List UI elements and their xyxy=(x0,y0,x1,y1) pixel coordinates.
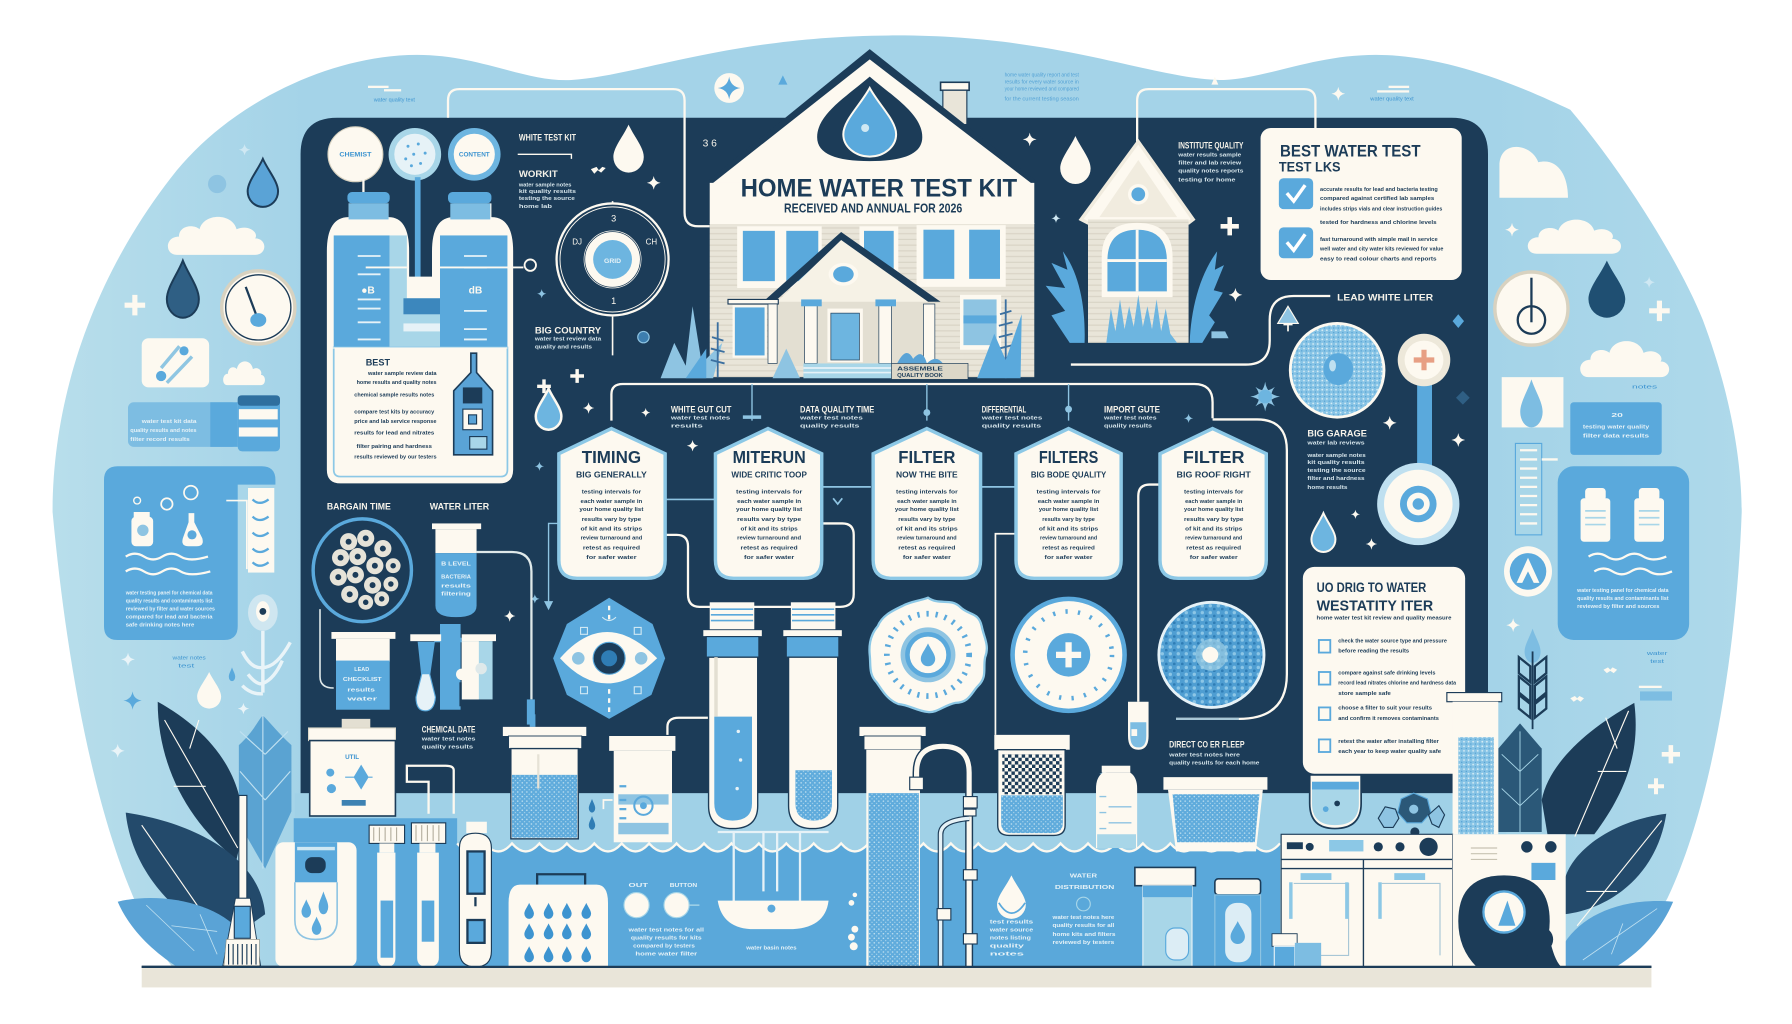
lead water filter label: LEAD WHITE LITER xyxy=(1337,293,1434,303)
bottom label text near vial: water test notes here xyxy=(1168,753,1240,759)
gauge right xyxy=(1495,272,1568,345)
filter card: filters: BIG BODE QUALITY xyxy=(1031,470,1107,480)
jar black pattern xyxy=(994,735,1070,835)
panel sparkles right xyxy=(1099,414,1465,778)
filter card: timing: each water sample in xyxy=(581,499,643,505)
chemical date text: water test notes xyxy=(420,737,475,743)
labels above filter cards: results xyxy=(671,423,703,429)
filter card: filter: retest as required xyxy=(898,546,956,552)
filter card: filter right: results vary by type xyxy=(1184,517,1243,523)
filter card: filters: results vary by type xyxy=(1042,517,1095,523)
twin bottle panel: home results and quality notes xyxy=(357,380,437,386)
filter card: miterun: review turnaround and xyxy=(737,535,802,541)
bottom drop and text: quality xyxy=(990,943,1026,949)
buttons with labels: compared by testers xyxy=(633,943,695,949)
filter card: filter right: each water sample in xyxy=(1185,499,1243,505)
filter card: filters: review turnaround and xyxy=(1040,535,1098,541)
bottom drop and text: WATER xyxy=(1070,874,1097,880)
filter card: timing: review turnaround and xyxy=(581,535,643,541)
top panel text: white test kit xyxy=(518,133,576,210)
labels above filter cards: water test notes xyxy=(980,415,1042,421)
top right text: testing for home xyxy=(1178,178,1235,184)
twin bottle panel: chemical sample results notes xyxy=(354,393,434,399)
bottom drop and text: home kits and filters xyxy=(1053,932,1115,938)
bottom label text near vial: quality results for each home xyxy=(1169,761,1259,767)
labels: bargain time, water liter: WATER LITER xyxy=(430,502,490,512)
right blue panel: quality results and contaminants list xyxy=(1577,596,1669,602)
top faint text block: results for every water source in xyxy=(1005,79,1079,85)
filter card: filter right: of kit and its strips xyxy=(1185,526,1242,532)
buttons with labels xyxy=(624,883,704,957)
big garage text xyxy=(1306,429,1367,491)
card: checklist: and confirm it removes contaminants xyxy=(1338,716,1439,722)
left blue panel: water testing panel for chemical data xyxy=(125,590,213,596)
top right text: filter and lab review xyxy=(1178,161,1242,167)
chemical date text: CHEMICAL DATE xyxy=(422,725,475,735)
filter card: filter: results vary by type xyxy=(898,517,955,523)
kit case xyxy=(509,874,608,967)
right small blue card: 20 xyxy=(1611,413,1623,419)
filter card: miterun: MITERUN xyxy=(733,447,806,467)
chemical date text: quality results xyxy=(422,745,473,751)
small stand jar: CHECKLIST xyxy=(343,677,382,683)
right sparkles: test xyxy=(1650,659,1665,665)
top decorations: water quality text xyxy=(373,98,415,104)
filter card: filter right: retest as required xyxy=(1186,546,1242,552)
card: best water test: includes strips vials and clear instruction guides xyxy=(1320,206,1442,212)
small house leaves xyxy=(1046,251,1229,343)
textured filter disc xyxy=(1290,323,1384,417)
cabinet xyxy=(1281,834,1453,967)
card: best water test: accurate results for lead and bacteria testing xyxy=(1320,187,1438,193)
card: checklist: each year to keep water quality safe xyxy=(1338,749,1441,755)
box: UTIL xyxy=(345,754,359,761)
bottom drop and text: quality results for all xyxy=(1053,923,1115,929)
plus circle with tube and lens xyxy=(1377,334,1459,545)
card: best water test: well water and city water kits reviewed for value xyxy=(1319,246,1443,252)
filter card: filters: retest as required xyxy=(1042,546,1095,552)
bottom label text near vial: DIRECT CO ER FLEEP xyxy=(1169,739,1245,749)
buttons with labels: home water filter xyxy=(635,951,698,957)
subtitle: RECEIVED AND ANNUAL FOR 2026 xyxy=(784,202,962,216)
top right text: quality notes reports xyxy=(1178,169,1243,175)
hourglass group xyxy=(410,624,496,711)
card: checklist: WESTATITY ITER xyxy=(1317,598,1433,614)
twin bottle panel: compare test kits by accuracy xyxy=(354,410,435,416)
tall tube right xyxy=(1447,693,1502,834)
bottom drop and text: notes listing xyxy=(990,935,1031,941)
filter card: filters: for safer water xyxy=(1045,555,1094,561)
pipe loop xyxy=(407,766,454,814)
big country label: water test review data xyxy=(534,337,602,343)
left blue band: quality results and notes xyxy=(130,428,197,434)
top faint text block: for the current testing season xyxy=(1005,97,1079,103)
buttons with labels: BUTTON xyxy=(670,883,697,889)
top faint text block: your home reviewed and compared xyxy=(1005,86,1079,92)
bubbles xyxy=(848,893,858,950)
number label: 3 6 xyxy=(703,138,717,149)
right small drop card xyxy=(1502,377,1563,427)
top decorations xyxy=(368,73,1414,104)
left blue panel: quality results and contaminants list xyxy=(126,598,213,604)
card: checklist: check the water source type and pressure xyxy=(1338,638,1447,644)
labels above filter cards: WHITE GUT CUT xyxy=(671,405,732,415)
card: checklist xyxy=(1303,567,1465,774)
floor line top xyxy=(142,966,1651,968)
filter card: miterun: WIDE CRITIC TOOP xyxy=(731,470,807,480)
badge: wavy seal xyxy=(869,598,987,712)
basin on stem: water basin notes xyxy=(745,946,797,952)
twin bottle panel: water sample review data xyxy=(367,371,437,377)
floor xyxy=(142,966,1651,987)
ladder strip xyxy=(1515,443,1558,535)
top panel text: white test kit: home lab xyxy=(519,204,553,210)
card: best water test: easy to read colour charts and reports xyxy=(1320,257,1437,263)
filter card: filter: review turnaround and xyxy=(897,535,957,541)
connector plug xyxy=(1176,718,1239,720)
filter card: miterun xyxy=(715,429,822,578)
labels above filter cards: water test notes xyxy=(799,415,863,421)
buttons with labels: water test notes for all xyxy=(627,927,704,933)
bottom drop and text: DISTRIBUTION xyxy=(1055,885,1114,891)
bottom cups xyxy=(1272,934,1321,967)
left small card with tools xyxy=(142,338,209,387)
filter card: filters: your home quality list xyxy=(1039,507,1098,513)
small stand jar: water xyxy=(345,697,379,703)
filter card: miterun: for safer water xyxy=(744,555,795,561)
tall cylinder xyxy=(859,727,926,967)
right sparkles xyxy=(1506,618,1680,794)
three label circles: CONTENT xyxy=(459,152,490,159)
lower tubes xyxy=(369,823,446,967)
card: checklist: before reading the results xyxy=(1338,649,1409,655)
bottom drop and text: water source xyxy=(988,927,1033,933)
big garage text: water lab reviews xyxy=(1306,441,1365,447)
box xyxy=(309,719,395,816)
house plants xyxy=(661,299,1022,378)
bin xyxy=(1163,777,1267,851)
cream drop and sparkles xyxy=(537,125,661,298)
filter card: timing: of kit and its strips xyxy=(581,526,642,532)
porch xyxy=(728,232,968,379)
cup xyxy=(1310,775,1361,829)
filter card: filter: for safer water xyxy=(903,555,952,561)
labels above filter cards: quality results xyxy=(800,423,859,429)
washer xyxy=(1453,834,1566,967)
big garage text: filter and hardness xyxy=(1307,476,1365,482)
card: best water test: compared against certified lab samples xyxy=(1320,196,1434,202)
dial: 3 xyxy=(611,214,616,224)
spiky star xyxy=(1246,377,1285,416)
twin bottle panel: results for lead and nitrates xyxy=(354,430,434,436)
top decorations: water quality text xyxy=(1369,97,1414,103)
big country label: BIG COUNTRY xyxy=(535,326,601,336)
top faint text block: home water quality report and test xyxy=(1005,73,1079,79)
card: best water test: TEST LKS xyxy=(1279,159,1341,174)
filter card: timing: BIG GENERALLY xyxy=(576,470,647,480)
right sparkles: water xyxy=(1645,651,1668,657)
three label circles: CHEMIST xyxy=(339,152,372,159)
connector: lead water liter xyxy=(1071,296,1330,365)
test tube two xyxy=(783,602,842,829)
dial: 1 xyxy=(611,296,616,306)
big garage text: testing the source xyxy=(1307,468,1366,474)
card: checklist: store sample safe xyxy=(1338,691,1391,697)
left blue band: water test kit data xyxy=(141,419,198,425)
top right connector xyxy=(1137,89,1315,142)
top panel text: white test kit: testing the source xyxy=(519,196,575,202)
bottom drop and text xyxy=(988,874,1115,957)
jar two xyxy=(589,718,709,842)
card: checklist: UO DRIG TO WATER xyxy=(1317,580,1426,595)
dark central panel xyxy=(301,118,1488,795)
filter card: timing: results vary by type xyxy=(582,517,641,523)
big garage text: home results xyxy=(1307,485,1347,491)
filter card: filter right: FILTER xyxy=(1183,447,1245,467)
card: best water test: BEST WATER TEST xyxy=(1280,142,1421,161)
bottom drop and text: reviewed by testers xyxy=(1053,940,1114,946)
filter card: miterun: of kit and its strips xyxy=(741,526,798,532)
jar one xyxy=(503,727,586,839)
top tube column: B LEVEL xyxy=(441,562,471,568)
main house xyxy=(705,49,1039,379)
filter card: filter: of kit and its strips xyxy=(896,526,958,532)
filter card: timing: testing intervals for xyxy=(582,490,642,496)
right blue panel xyxy=(1558,466,1689,640)
badge: textured disc xyxy=(1159,602,1264,707)
left outer column: drops, cloud, gauge xyxy=(125,144,278,318)
buttons with labels: quality results for kits xyxy=(631,935,702,941)
top tube column: BACTERIA xyxy=(441,574,471,580)
card: checklist: record lead nitrates chlorine and hardness data xyxy=(1338,681,1457,687)
bowl of filter media xyxy=(313,519,411,622)
small stand jar xyxy=(320,609,395,710)
labels above filter cards: quality results xyxy=(1104,423,1152,429)
card: best water test xyxy=(1261,128,1462,280)
brush device xyxy=(223,795,261,966)
right small blue card xyxy=(1570,385,1662,455)
left blue band: filter record results xyxy=(130,437,190,443)
left leaves xyxy=(118,702,291,967)
title: HOME WATER TEST KIT xyxy=(741,175,1018,203)
filter card: filter: FILTER xyxy=(898,447,956,467)
top faint text block xyxy=(1005,73,1079,103)
filter card: timing: your home quality list xyxy=(579,507,644,513)
gears xyxy=(1378,793,1445,837)
filter card: miterun: retest as required xyxy=(741,546,798,552)
filter card: filter right: BIG ROOF RIGHT xyxy=(1177,470,1252,480)
right leaves xyxy=(1498,703,1673,967)
right small blue card: notes xyxy=(1632,385,1657,391)
eye ornament xyxy=(242,594,290,694)
top panel text: white test kit: kit quality results xyxy=(519,189,576,195)
small triangle marker xyxy=(1278,306,1470,405)
filter card: timing xyxy=(559,429,665,578)
card: best water test: fast turnaround with simple mail in service xyxy=(1320,237,1438,243)
faucet xyxy=(910,746,977,967)
dial: CH xyxy=(646,238,657,247)
windows xyxy=(737,225,1006,350)
labels: bargain time, water liter: BARGAIN TIME xyxy=(327,502,391,512)
filter card: filter: each water sample in xyxy=(897,499,957,505)
filter card: filter: NOW THE BITE xyxy=(896,470,958,480)
card: checklist: choose a filter to suit your results xyxy=(1338,706,1432,712)
graduated bottle xyxy=(1096,766,1137,848)
filter card: filter right: testing intervals for xyxy=(1184,490,1244,496)
filter card: filters: FILTERS xyxy=(1039,447,1098,467)
top tube column: results xyxy=(441,583,471,589)
bottom drop and text: water test notes here xyxy=(1051,915,1114,921)
wheat xyxy=(1519,629,1546,729)
right blue panel: reviewed by filter and sources xyxy=(1577,604,1659,610)
top panel text: white test kit: WHITE TEST KIT xyxy=(519,133,576,143)
filter card: timing: for safer water xyxy=(586,555,638,561)
left blue panel: safe drinking notes here xyxy=(126,622,194,628)
filter card: timing: retest as required xyxy=(583,546,641,552)
dial: DJ xyxy=(572,238,582,247)
left lower sparkles and drop: test xyxy=(178,663,195,669)
card: checklist: retest the water after installing filter xyxy=(1338,739,1440,745)
basin on stem xyxy=(718,832,829,952)
labels above filter cards: water test notes xyxy=(1103,415,1157,421)
filter card: filters: of kit and its strips xyxy=(1039,526,1098,532)
labels: bargain time, water liter xyxy=(327,502,490,512)
filter card: timing: TIMING xyxy=(582,447,641,467)
small ring xyxy=(638,331,649,343)
right circle icon xyxy=(1504,546,1552,597)
filter card: filter: your home quality list xyxy=(895,507,959,513)
labels above filter cards: quality results xyxy=(982,423,1041,429)
top tube column: filtering xyxy=(441,591,472,597)
lower device xyxy=(275,842,357,967)
labels above filter cards: water test notes xyxy=(669,415,730,421)
left lower sparkles and drop xyxy=(111,653,249,758)
dial xyxy=(557,201,669,355)
dial: GRID xyxy=(604,258,621,265)
top right text: water results sample xyxy=(1177,153,1241,159)
card: checklist: compare against safe drinking levels xyxy=(1338,670,1435,676)
left blue panel xyxy=(104,466,275,640)
big garage text: water sample notes xyxy=(1306,453,1366,459)
left blue panel: reviewed by filter and water sources xyxy=(126,606,215,612)
buttons with labels: OUT xyxy=(629,883,649,889)
test tube one xyxy=(703,602,762,829)
filter card: miterun: your home quality list xyxy=(736,507,802,513)
filter card: filters: each water sample in xyxy=(1038,499,1100,505)
small cloud xyxy=(223,361,265,385)
bottom jars xyxy=(1135,867,1261,967)
sparkles right of house xyxy=(1023,133,1242,302)
twin bottle panel: BEST xyxy=(366,358,390,368)
filter card: miterun: testing intervals for xyxy=(736,490,803,496)
top panel text: white test kit: WORKIT xyxy=(519,169,558,179)
small house xyxy=(1081,142,1193,343)
filter card connectors xyxy=(544,384,1287,735)
small stand jar: LEAD xyxy=(354,667,369,673)
top right text: INSTITUTE QUALITY xyxy=(1178,141,1243,151)
small vial xyxy=(1128,702,1149,750)
porch: QUALITY BOOK xyxy=(897,373,943,379)
big country label: quality and results xyxy=(535,345,592,351)
handheld meter xyxy=(459,822,491,967)
left blue band xyxy=(128,395,280,451)
bottom drop and text: notes xyxy=(990,951,1024,957)
bottom label text near vial xyxy=(1168,739,1259,767)
twin bottle panel: price and lab service response xyxy=(354,419,437,425)
top panel text: white test kit: water sample notes xyxy=(518,182,571,188)
twin bottle panel: ●B xyxy=(361,286,375,297)
top right text xyxy=(1177,141,1243,184)
filter card: filter: testing intervals for xyxy=(896,490,959,496)
top left connector xyxy=(448,89,710,226)
badge: plus seal xyxy=(1013,599,1125,711)
twin bottle panel: results reviewed by our testers xyxy=(354,454,437,460)
filter card: filter right xyxy=(1160,429,1266,578)
filter card: filter right: your home quality list xyxy=(1184,507,1244,513)
filter card: miterun: results vary by type xyxy=(737,517,801,523)
chemical date text xyxy=(420,725,475,751)
top tube column xyxy=(432,523,535,727)
labels above filter cards: IMPORT GUTE xyxy=(1104,405,1160,415)
twin bottle panel xyxy=(327,177,536,483)
gauge left xyxy=(222,271,295,344)
eye hexagon xyxy=(553,598,665,719)
sparkle xyxy=(504,610,515,622)
right blue panel: water testing panel for chemical data xyxy=(1576,588,1669,594)
left lower sparkles and drop: water notes xyxy=(171,655,206,661)
bottom drop and text: test results xyxy=(990,919,1033,925)
right small blue card: testing water quality xyxy=(1583,425,1650,431)
small stand jar: results xyxy=(347,687,375,693)
labels above filter cards: DATA QUALITY TIME xyxy=(800,405,874,415)
panel sparkles and drop xyxy=(530,369,698,603)
filter card: miterun: each water sample in xyxy=(737,499,802,505)
house ground line xyxy=(657,380,1063,382)
filter card: filters xyxy=(1016,429,1121,578)
labels above filter cards xyxy=(669,405,1160,429)
big garage text: BIG GARAGE xyxy=(1307,429,1367,439)
right outer column: clouds, gauge, drop xyxy=(1499,147,1670,377)
labels above filter cards: DIFFERENTIAL xyxy=(982,405,1027,415)
card: checklist: home water test kit review and quality measure xyxy=(1317,615,1451,621)
filter card: filter xyxy=(873,429,981,578)
porch: ASSEMBLE xyxy=(897,366,943,372)
right small blue card: filter data results xyxy=(1583,434,1649,440)
water band xyxy=(294,793,1506,967)
filter card: filters: testing intervals for xyxy=(1037,490,1101,496)
card: best water test: tested for hardness and chlorine levels xyxy=(1320,220,1437,226)
three label circles xyxy=(328,127,501,182)
big garage text: kit quality results xyxy=(1307,460,1365,466)
left blue panel: compared for lead and bacteria xyxy=(126,614,213,620)
big country label xyxy=(534,326,602,351)
twin bottle panel: dB xyxy=(469,286,482,297)
twin bottle panel: filter pairing and hardness xyxy=(357,444,432,450)
filter card: filter right: for safer water xyxy=(1190,555,1239,561)
filter card: filter right: review turnaround and xyxy=(1185,535,1243,541)
